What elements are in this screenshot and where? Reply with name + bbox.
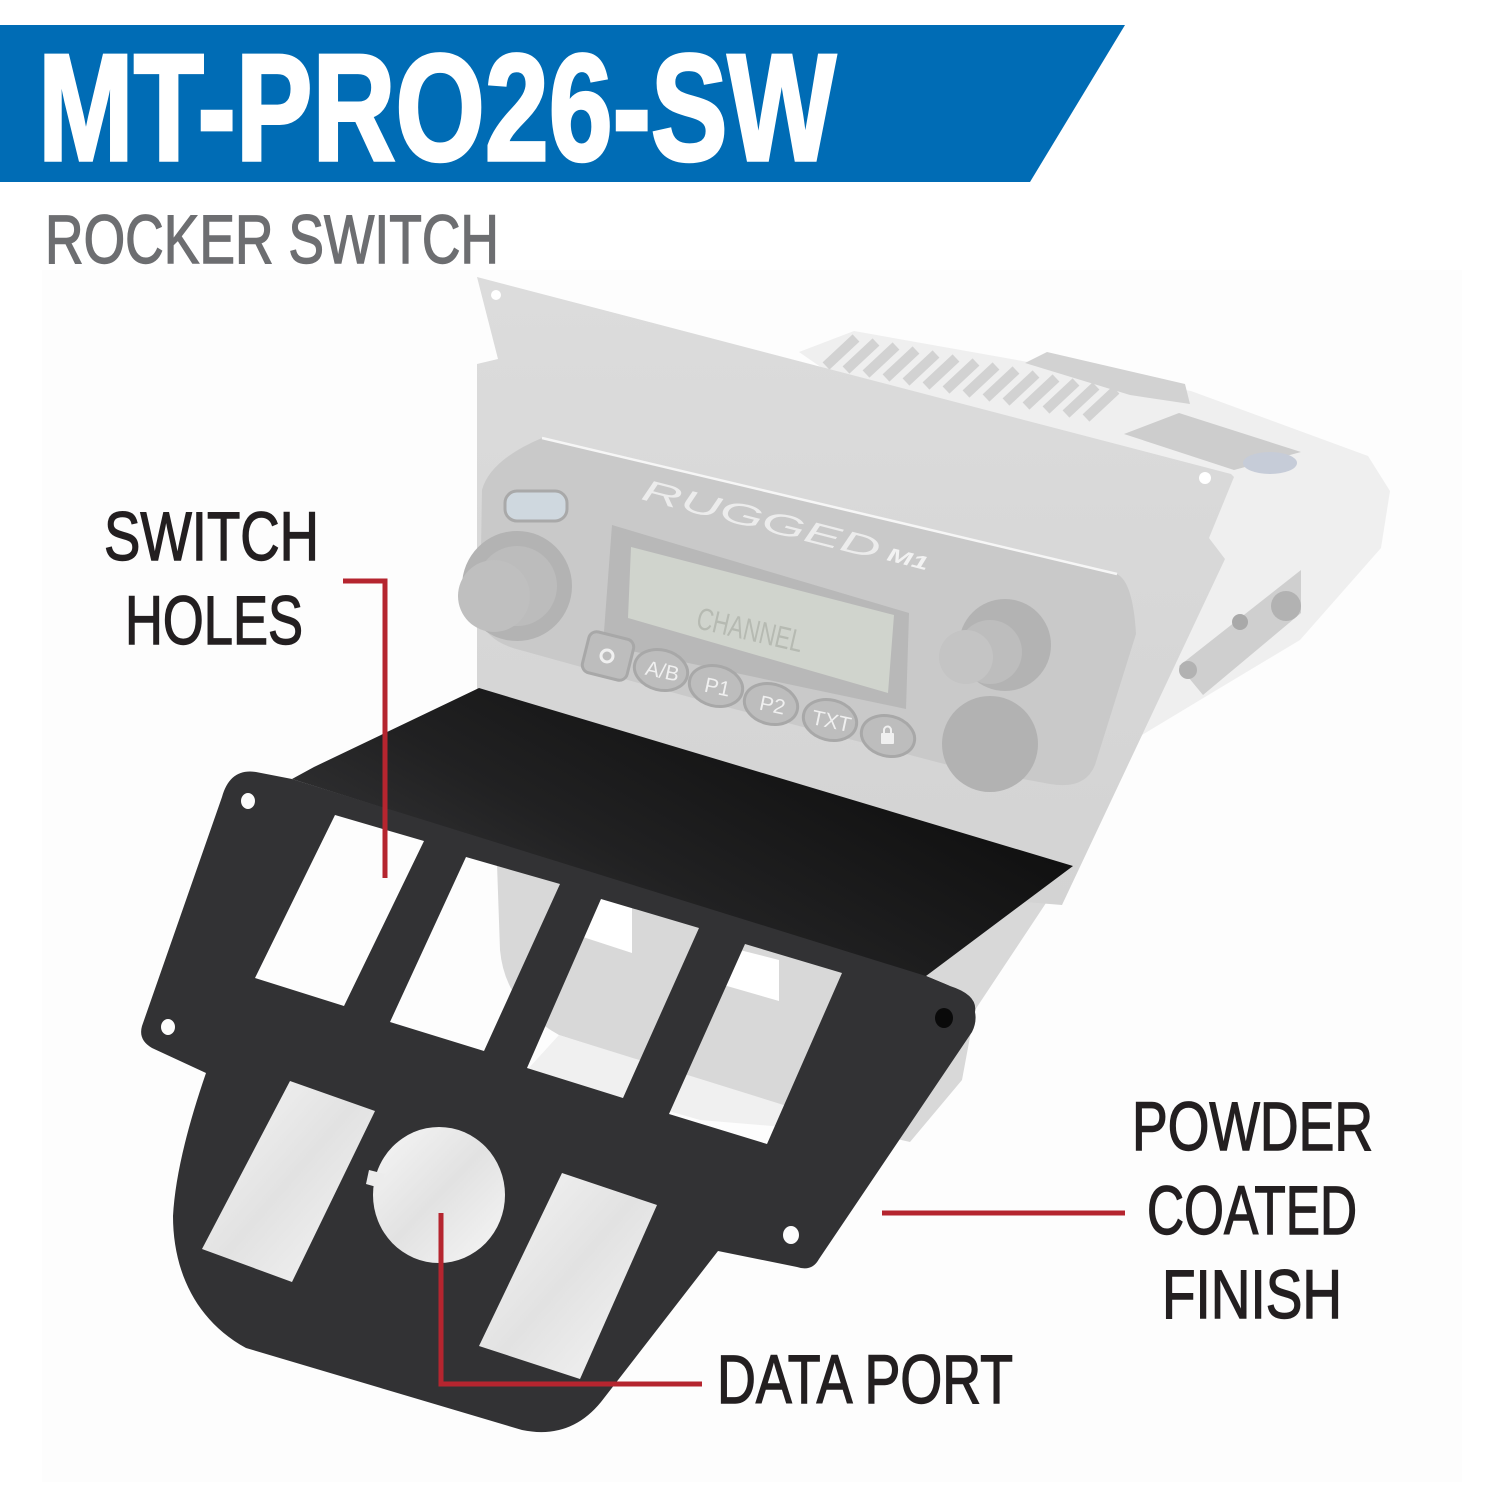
powder coated label: COATED xyxy=(1147,1172,1357,1249)
product photo xyxy=(141,277,1390,1432)
button labels xyxy=(643,657,853,737)
faded mounting panel xyxy=(477,277,1234,905)
round cap xyxy=(942,696,1038,792)
switch holes label: HOLES xyxy=(125,582,303,659)
lock icon xyxy=(881,727,894,744)
screen text: CHANNEL xyxy=(693,601,807,659)
data port label: DATA PORT xyxy=(717,1341,1013,1418)
side bracket xyxy=(1179,570,1301,695)
switch holes label xyxy=(104,498,319,659)
indicator pill xyxy=(505,491,567,521)
switch holes label: SWITCH xyxy=(104,498,319,575)
subtitle: ROCKER SWITCH xyxy=(45,201,499,278)
handle bar xyxy=(1025,352,1190,404)
radio brand xyxy=(638,474,931,575)
left knob xyxy=(458,531,572,641)
shelf top face xyxy=(292,688,1073,986)
black switch plate xyxy=(141,688,1073,1432)
faded radio faceplate xyxy=(458,438,1136,792)
powder coated label: POWDER xyxy=(1132,1088,1373,1165)
button labels: TXT xyxy=(810,706,853,737)
lower left switch hole xyxy=(202,1081,375,1282)
leader line xyxy=(343,581,385,878)
powder coated label: FINISH xyxy=(1162,1256,1342,1333)
leader line xyxy=(441,1213,702,1384)
callout: switch holes xyxy=(104,498,385,878)
button labels: P1 xyxy=(702,674,732,702)
leader line xyxy=(882,1210,1125,1216)
faded bracket leg behind plate xyxy=(497,864,1048,1142)
right ear mounting hole xyxy=(935,1008,953,1028)
radio brand: M1 xyxy=(885,544,931,575)
callout: powder coated finish xyxy=(882,1088,1373,1333)
heat sink vents xyxy=(826,338,1116,418)
plate front face xyxy=(141,772,976,1432)
product label xyxy=(1124,413,1301,470)
title banner xyxy=(0,23,1125,193)
right knob xyxy=(939,599,1051,691)
product code heading: MT-PRO26-SW xyxy=(38,23,836,193)
radio buttons xyxy=(581,630,919,762)
data port hole xyxy=(366,1127,505,1263)
powder coated label xyxy=(1132,1088,1373,1333)
faded radio body behind panel xyxy=(799,331,1390,735)
button labels: P2 xyxy=(757,692,787,720)
lower right switch hole xyxy=(479,1173,657,1379)
radio brand: RUGGED xyxy=(638,474,884,566)
button labels: A/B xyxy=(643,657,681,686)
LCD screen xyxy=(628,547,894,693)
label logo xyxy=(1243,452,1297,474)
callout: data port xyxy=(441,1213,1013,1418)
screen bezel xyxy=(603,525,909,709)
gear icon xyxy=(601,650,613,662)
